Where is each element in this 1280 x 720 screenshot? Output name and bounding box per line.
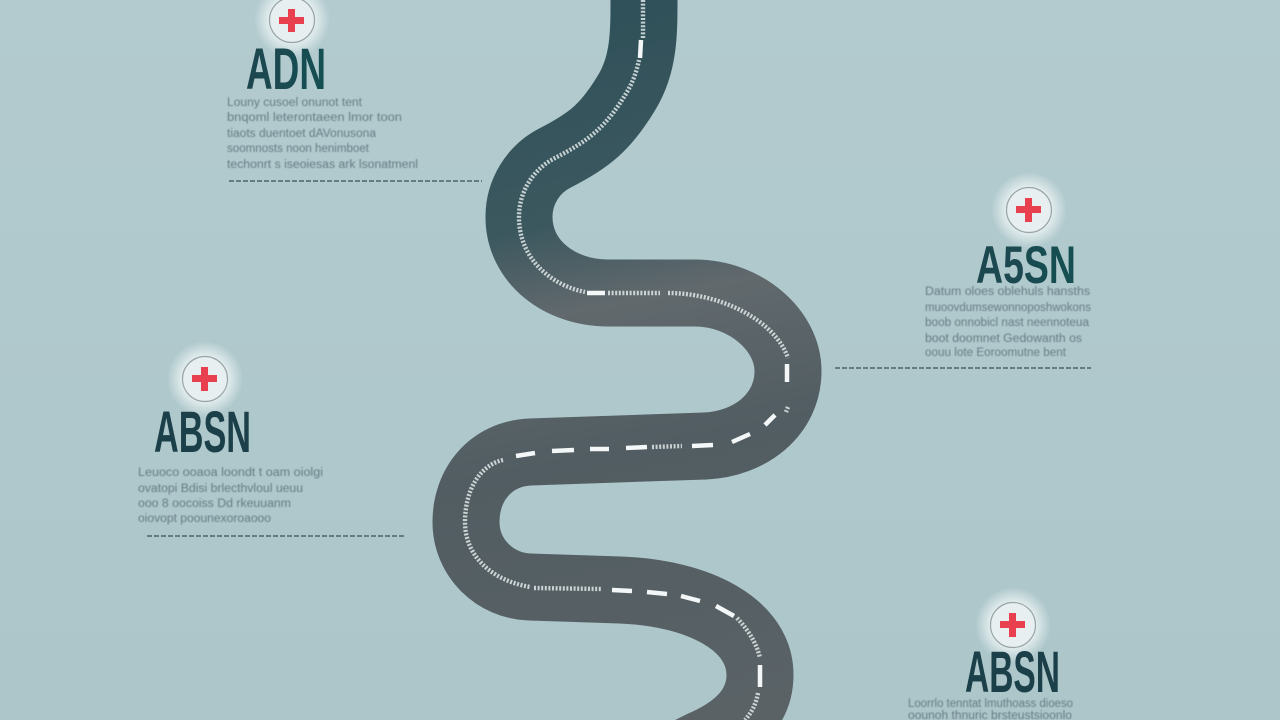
text block: ooo 8 oocoiss Dd rkeuuanm xyxy=(138,498,291,510)
text block: oouu lote Eoroomutne bent xyxy=(925,347,1067,359)
text block: boob onnobicl nast neennoteua xyxy=(925,317,1090,329)
text block: muoovdumsewonnoposhwokons xyxy=(925,302,1091,314)
icon: medical cross xyxy=(167,341,243,417)
text block: Loorrlo tenntat lmuthoass dioeso xyxy=(908,698,1073,710)
leader line xyxy=(147,535,405,537)
text block xyxy=(925,286,1091,359)
text block: techonrt s iseoiesas ark lsonatmenl xyxy=(227,159,418,171)
icon: medical cross xyxy=(256,0,328,55)
panel: right A5SN xyxy=(835,172,1091,368)
heading: A5SN xyxy=(976,236,1076,295)
heading: ABSN xyxy=(965,640,1060,705)
text block: oiovopt poounexoroaooo xyxy=(138,513,271,525)
panel: left ABSN xyxy=(138,341,405,536)
text block xyxy=(908,698,1073,720)
road surface xyxy=(466,0,788,720)
leader line xyxy=(229,180,482,182)
icon: medical cross xyxy=(991,172,1067,248)
fine chain centre markings xyxy=(465,0,788,720)
text block xyxy=(138,467,323,525)
text block: Louny cusoel onunot tent xyxy=(227,97,363,109)
heading: ADN xyxy=(246,37,326,102)
text block: soomnosts noon henimboet xyxy=(227,143,370,155)
leader line xyxy=(835,367,1091,369)
text block: Datum oloes oblehuls hansths xyxy=(925,286,1090,298)
winding road xyxy=(465,0,788,720)
text block: boot doomnet Gedowanth os xyxy=(925,333,1082,345)
text block: ovatopi Bdisi brlecthvloul ueuu xyxy=(138,483,303,495)
text block: Leuoco ooaoa loondt t oam oiolgi xyxy=(138,467,323,479)
panel: top left ADN xyxy=(227,0,482,181)
text block: tiaots duentoet dAVonusona xyxy=(227,128,377,140)
solid white dashes xyxy=(516,40,787,687)
panel: bottom right ABSN xyxy=(908,587,1073,720)
heading: ABSN xyxy=(154,400,251,465)
icon: medical cross xyxy=(978,590,1048,660)
text block xyxy=(227,97,418,171)
text block: bnqoml leterontaeen lmor toon xyxy=(227,112,402,124)
